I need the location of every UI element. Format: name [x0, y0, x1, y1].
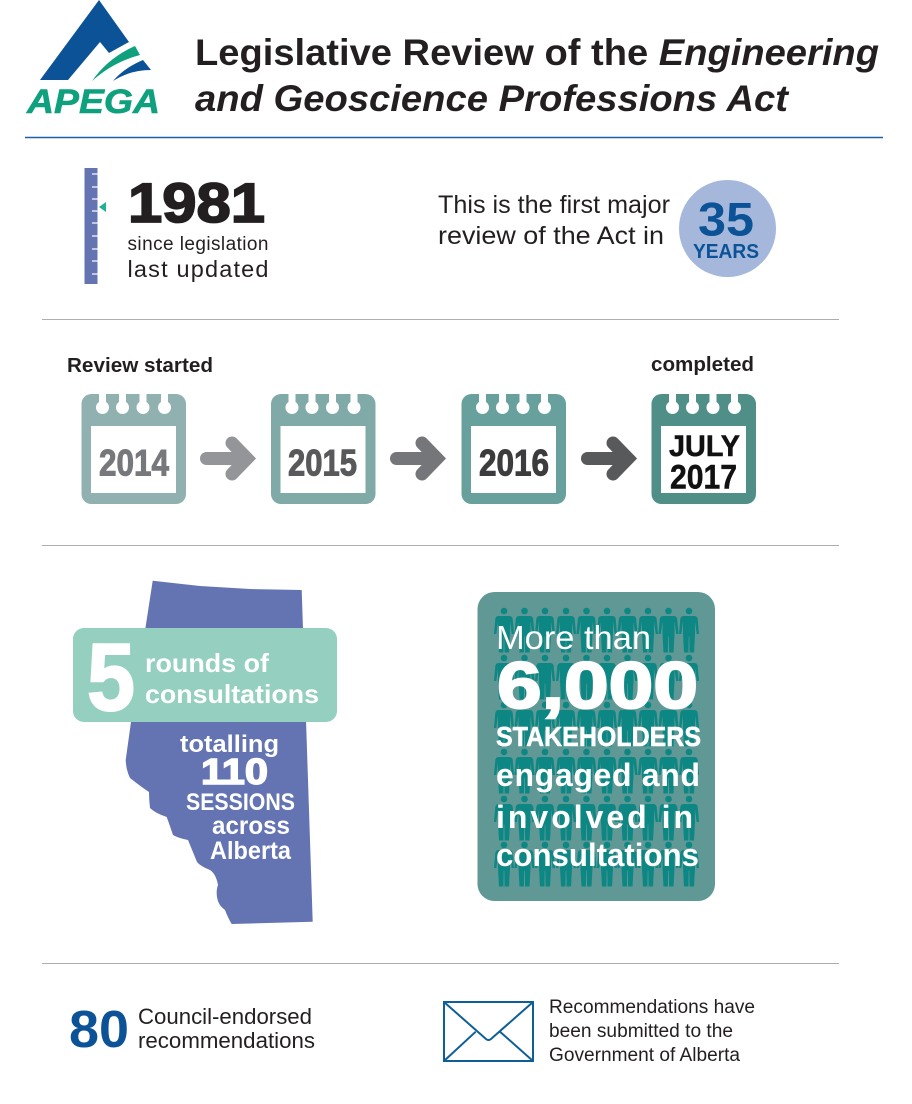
calendar 2015	[271, 393, 376, 504]
banner: 5 rounds: 5	[87, 624, 135, 731]
sessions text: totalling	[180, 731, 279, 758]
first major review text: review of the Act in	[438, 222, 664, 250]
map of Alberta	[126, 581, 313, 924]
year 1981 text block: since legislation	[128, 234, 268, 255]
sessions text	[180, 731, 295, 865]
banner: 5 rounds: rounds of	[145, 648, 269, 678]
first major review text: This is the first major	[438, 191, 670, 219]
stakeholders text: 6,000	[497, 648, 698, 722]
sessions text: 110	[201, 751, 268, 792]
calendar 2016: 2016	[479, 442, 549, 484]
year 1981 text block: last updated	[128, 256, 268, 282]
submitted text: Government of Alberta	[549, 1045, 740, 1066]
stakeholders text: engaged and	[496, 757, 700, 793]
logo blue swoosh	[113, 60, 151, 81]
panel: Alberta consultations	[73, 581, 337, 924]
calendar 2016	[462, 393, 566, 504]
calendar 2014: 2014	[99, 442, 169, 484]
panel: 6,000 stakeholders	[478, 592, 715, 901]
logo green swoosh	[92, 46, 140, 81]
banner: 5 rounds: consultations	[145, 679, 319, 709]
icon: ruler timeline	[84, 168, 106, 284]
stakeholders text: More than	[496, 619, 651, 656]
logo mountain	[40, 0, 129, 80]
stakeholders text: involved in	[496, 799, 693, 835]
calendar 2014	[82, 393, 186, 504]
title: Legislative Review of the Engineering	[195, 32, 879, 73]
stakeholders text: STAKEHOLDERS	[496, 721, 701, 752]
stakeholders text: consultations	[496, 837, 699, 873]
submitted text: Recommendations have	[549, 997, 755, 1018]
logo: APEGA	[26, 0, 160, 121]
arrow 2	[396, 443, 437, 474]
arrow 1	[206, 443, 247, 474]
badge: 35 years	[679, 180, 776, 277]
calendar July 2017: JULY	[669, 430, 740, 463]
sessions text: SESSIONS	[186, 789, 295, 816]
badge: 35 years: 35	[698, 192, 754, 246]
stat: 80 recommendations: recommendations	[138, 1028, 315, 1053]
submitted text	[549, 997, 755, 1066]
stat: 80 recommendations: Council-endorsed	[138, 1004, 312, 1029]
logo wordmark: APEGA	[26, 83, 160, 121]
calendar July 2017: 2017	[670, 458, 737, 496]
sessions text: Alberta	[210, 837, 292, 865]
title: and Geoscience Professions Act	[195, 78, 790, 119]
year 1981 text block: 1981	[128, 171, 265, 234]
banner: 5 rounds	[73, 624, 337, 731]
label: review started: Review started	[67, 354, 213, 377]
first major review text	[438, 191, 670, 250]
stakeholders text	[496, 619, 701, 873]
submitted text: been submitted to the	[549, 1021, 733, 1042]
icon: grid of people	[494, 608, 699, 886]
arrow 3	[588, 443, 628, 474]
sessions text: across	[212, 812, 290, 840]
label: completed: completed	[651, 353, 754, 376]
calendar July 2017	[652, 393, 756, 504]
badge: 35 years: YEARS	[693, 241, 759, 263]
stat: 80 recommendations: 80	[69, 1001, 129, 1059]
calendar 2015: 2015	[288, 442, 357, 484]
title	[195, 32, 879, 119]
icon: envelope	[444, 1002, 533, 1061]
stat: 80 recommendations	[69, 1001, 315, 1059]
year 1981 text block	[128, 171, 268, 282]
